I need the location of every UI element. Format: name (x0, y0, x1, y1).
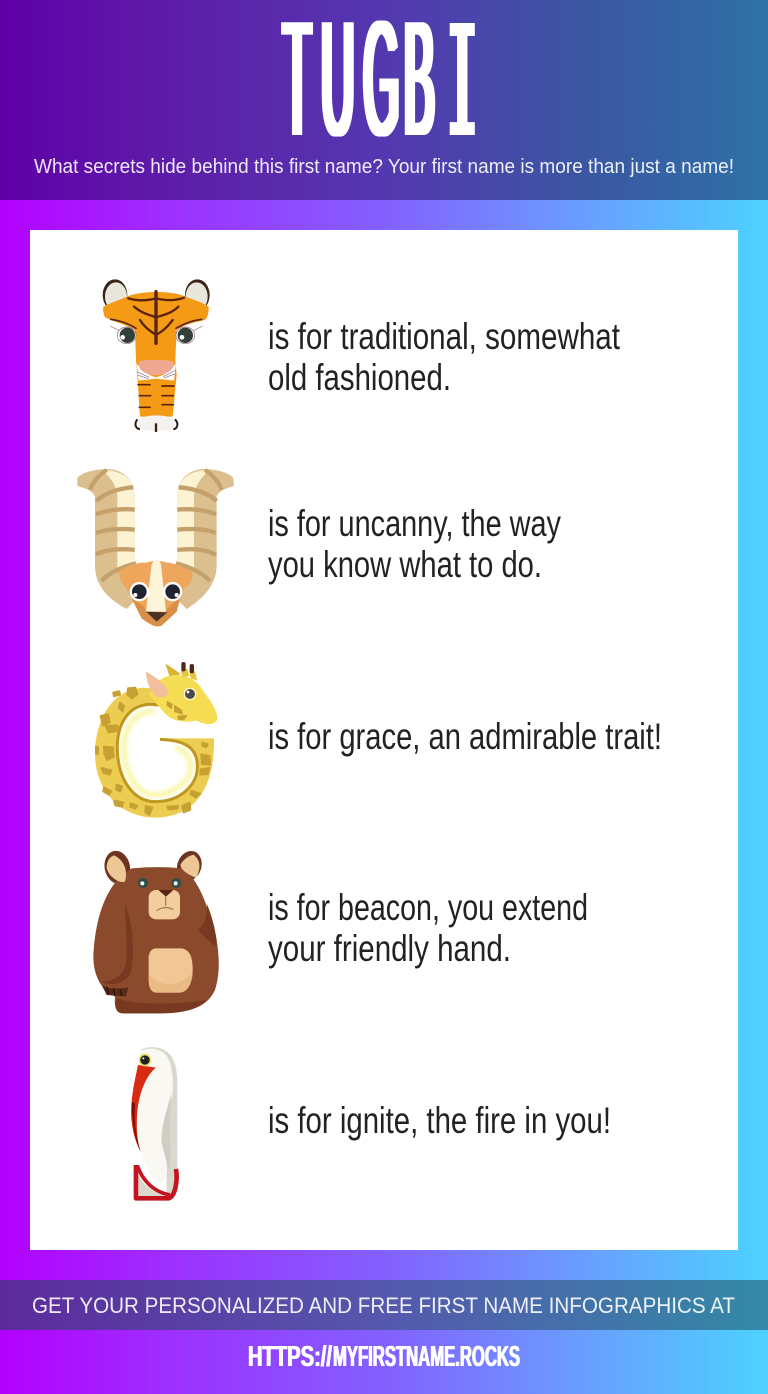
row: letter U (77, 469, 561, 626)
icon: ram letter U (77, 469, 234, 626)
header band (0, 0, 768, 200)
description B: your friendly hand. (268, 928, 511, 969)
white content panel (30, 230, 738, 1250)
row: letter I (131, 1047, 611, 1198)
description T: old fashioned. (268, 357, 451, 398)
description T: is for traditional, somewhat (268, 316, 621, 357)
icon: giraffe letter G (95, 662, 217, 818)
subtitle: What secrets hide behind this first name? Your first name is more than just a name! (34, 156, 734, 178)
icon: stork letter I (131, 1047, 177, 1198)
icon: tiger letter T (103, 279, 210, 432)
footer url: MYFIRSTNAME.ROCKS (333, 1341, 520, 1373)
footer url: HTTPS:// (248, 1341, 332, 1373)
row: letter G (95, 662, 662, 818)
description B: is for beacon, you extend (268, 887, 588, 928)
footer url (248, 1341, 520, 1373)
description U: you know what to do. (268, 544, 542, 585)
icon: bear letter B (93, 848, 219, 1013)
description U (268, 503, 561, 585)
row: letter T (103, 279, 621, 432)
description I: is for ignite, the fire in you! (268, 1100, 611, 1141)
description U: is for uncanny, the way (268, 503, 561, 544)
description G: is for grace, an admirable trait! (268, 716, 662, 757)
footer call to action: GET YOUR PERSONALIZED AND FREE FIRST NAME INFOGRAPHICS AT (32, 1293, 735, 1318)
description B (268, 887, 588, 969)
footer band (0, 1280, 768, 1330)
description T (268, 316, 621, 398)
row: letter B (93, 848, 588, 1013)
